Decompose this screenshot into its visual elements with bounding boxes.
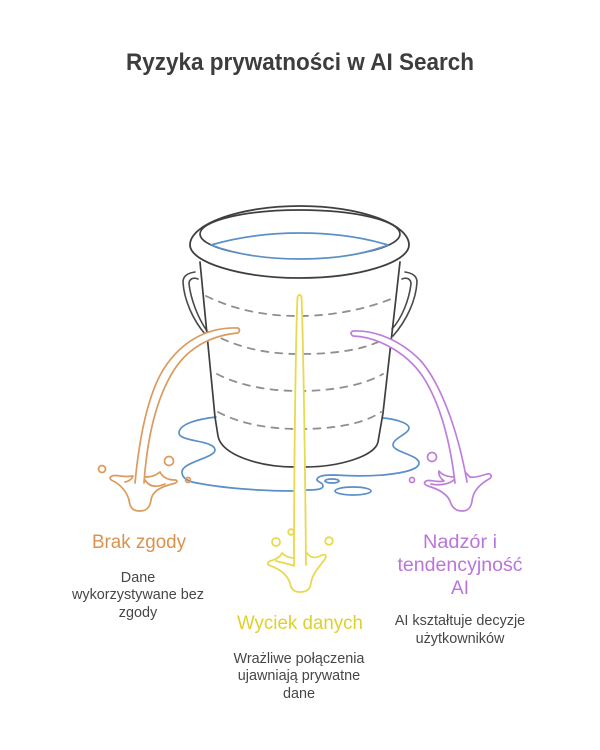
water surface xyxy=(211,233,388,259)
label: Nadzór i tendencyjność AI: AI kształtuje decyzje xyxy=(395,613,525,629)
label: Wyciek danych: Wyciek danych xyxy=(237,613,363,634)
label: Nadzór i tendencyjność AI xyxy=(395,532,525,647)
label: Wyciek danych: dane xyxy=(283,686,315,702)
label: Brak zgody xyxy=(71,532,204,621)
label: Nadzór i tendencyjność AI: Nadzór i xyxy=(423,532,497,553)
label: Brak zgody: zgody xyxy=(119,605,158,621)
label: Wyciek danych: ujawniają prywatne xyxy=(238,668,360,684)
label: Brak zgody: Dane xyxy=(121,570,155,586)
bucket handles xyxy=(183,272,417,336)
label: Wyciek danych: Wrażliwe połączenia xyxy=(234,651,364,667)
water level dashes xyxy=(206,296,396,429)
icon: orange stream and splash xyxy=(98,328,240,511)
bucket body xyxy=(200,262,400,467)
puddle xyxy=(179,417,419,495)
title: Ryzyka prywatności w AI Search xyxy=(126,49,474,76)
icon: bucket xyxy=(183,206,417,467)
icon: purple stream and splash xyxy=(351,331,491,511)
label: Nadzór i tendencyjność AI: użytkowników xyxy=(416,631,505,647)
label: Wyciek danych xyxy=(234,613,364,702)
label: Brak zgody: Brak zgody xyxy=(92,532,186,553)
label: Nadzór i tendencyjność AI: tendencyjność xyxy=(398,555,522,576)
label: Brak zgody: wykorzystywane bez xyxy=(71,587,204,603)
bucket rim xyxy=(190,206,409,278)
label: Nadzór i tendencyjność AI: AI xyxy=(451,578,469,599)
icon: yellow stream and splash xyxy=(268,295,333,592)
